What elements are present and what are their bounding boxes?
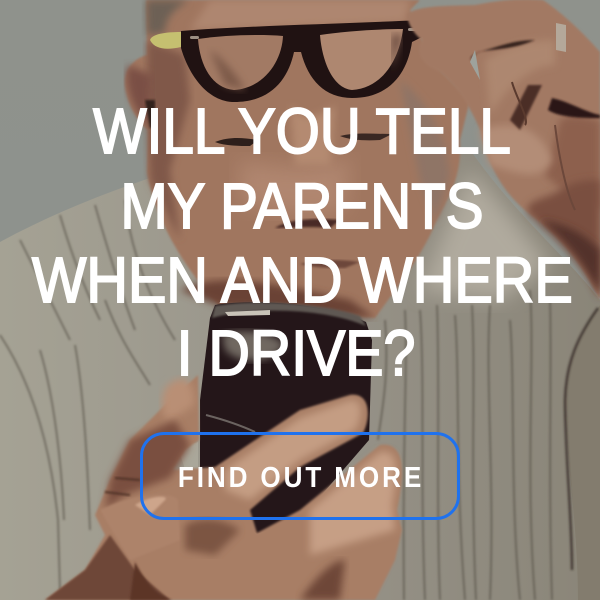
sweater — [0, 150, 600, 600]
headline line 4: I DRIVE? — [177, 317, 415, 389]
face and neck — [125, 0, 470, 318]
headline line 2: MY PARENTS — [121, 170, 483, 242]
glasses — [150, 20, 424, 102]
headline line 3: WHEN AND WHERE — [32, 244, 573, 316]
right sleeve — [565, 305, 600, 600]
sleeve fold shadow — [565, 308, 598, 570]
button: find out more — [140, 432, 460, 520]
raised hand — [407, 0, 600, 300]
button label: FIND OUT MORE — [178, 462, 424, 494]
phone — [200, 302, 372, 534]
hinge highlight — [422, 27, 445, 42]
headline — [31, 95, 573, 389]
sweater gap between thumb and phone — [178, 442, 198, 472]
wedding ring — [556, 23, 566, 52]
lower hand — [45, 375, 402, 600]
headline line 1: WILL YOU TELL — [93, 95, 511, 167]
